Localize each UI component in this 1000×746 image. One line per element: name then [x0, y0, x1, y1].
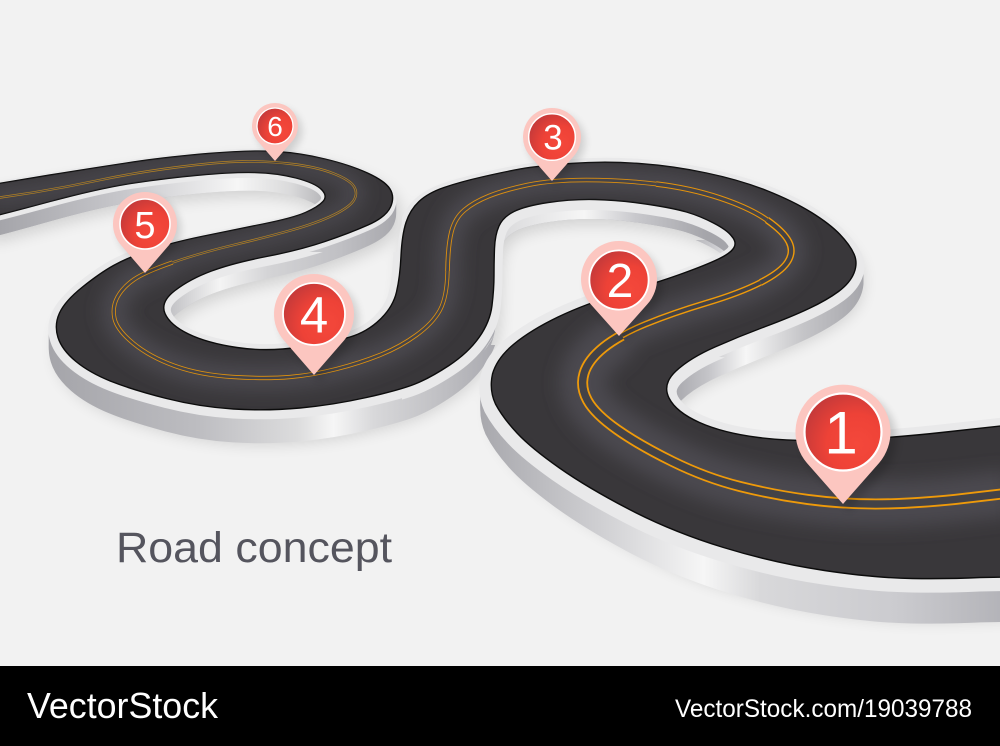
pin 5 [113, 192, 181, 278]
winding road [0, 151, 1000, 617]
footer brand: VectorStock [27, 685, 219, 726]
footer bar [0, 666, 1000, 746]
pin 2 [581, 241, 662, 342]
pin 1 [796, 385, 896, 511]
pin 6 [252, 103, 302, 166]
title: Road concept [116, 524, 392, 572]
pin 3 [523, 108, 585, 186]
pin 1: 1 [824, 400, 858, 466]
pin 4 [274, 274, 359, 381]
pin 5: 5 [134, 205, 156, 247]
road side wall [0, 156, 1000, 612]
pin 4: 4 [300, 286, 328, 344]
footer image id: VectorStock.com/19039788 [675, 695, 972, 723]
asphalt centre sheen [0, 161, 1000, 504]
pin 2: 2 [607, 255, 633, 308]
yellow double centre line [0, 161, 1000, 504]
road ground shadow [0, 161, 1000, 617]
pin 3: 3 [543, 118, 563, 158]
road light rim [0, 153, 1000, 582]
pin 6: 6 [267, 111, 283, 142]
asphalt surface [0, 151, 1000, 579]
